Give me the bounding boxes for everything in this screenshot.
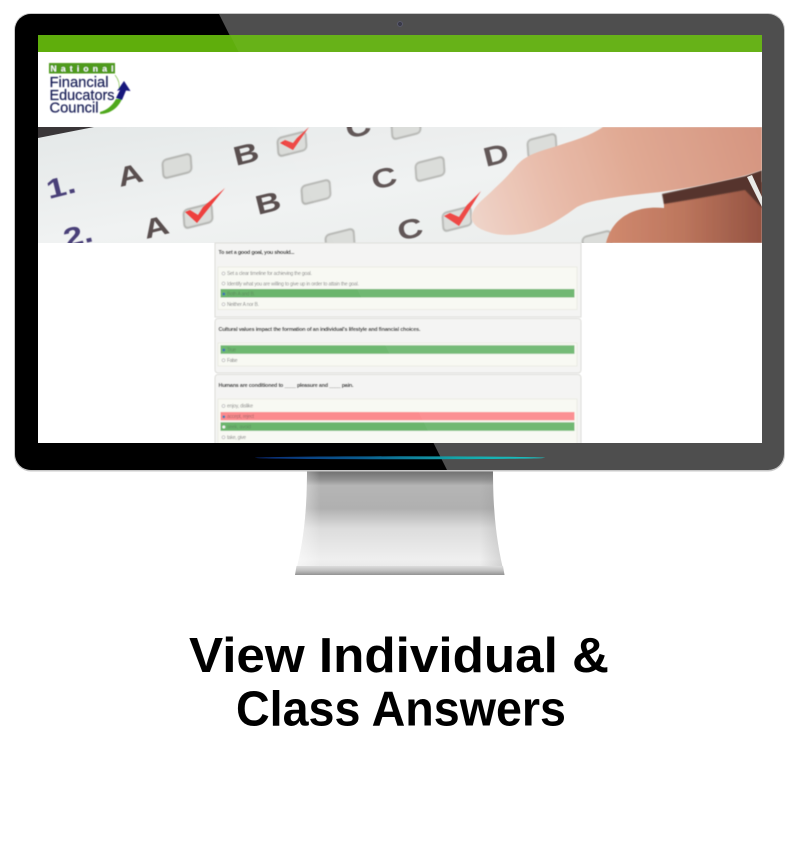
question card 3: seek, avoid <box>227 424 251 430</box>
answer letters: 1. <box>43 168 79 205</box>
question card 1: Identify what you are willing to give up in order to attain the goal. <box>227 282 359 288</box>
answer letters: A <box>140 209 172 245</box>
question card 2: True <box>227 348 236 354</box>
question card 3: Humans are conditioned to ____ pleasure and ____ pain. <box>218 383 354 389</box>
lower finger and shadow <box>606 182 762 243</box>
red checkmarks <box>185 127 481 226</box>
title line 1: View Individual & <box>189 629 609 683</box>
top green bar <box>38 35 762 52</box>
answer letters: C <box>368 160 400 196</box>
question card 2: Cultural values impact the formation of an individual's lifestyle and financial choices. <box>218 327 421 333</box>
question card 3 <box>214 374 582 443</box>
answer letters: B <box>230 136 262 172</box>
answer letters: D <box>480 137 512 173</box>
logo: National Financial Educators Council <box>49 63 130 116</box>
question card 2 <box>215 318 581 373</box>
quiz column <box>214 243 581 454</box>
question card 3: accept, reject <box>227 414 255 420</box>
hero photo: answer sheet with checkmarks and finger <box>38 127 762 243</box>
answer letters <box>47 127 508 243</box>
question card 3: enjoy, dislike <box>227 404 253 410</box>
question card 1: Neither A nor B. <box>227 302 259 308</box>
question card 1: Set a clear timeline for achieving the goal. <box>227 271 312 277</box>
logo: National Financial Educators Council: National <box>50 64 114 74</box>
answer letters: A <box>114 157 146 193</box>
question card 3: take, give <box>227 435 246 441</box>
logo: National Financial Educators Council: Educators <box>50 87 114 104</box>
logo: National Financial Educators Council: Financial <box>50 74 108 91</box>
answer letters: C <box>342 109 374 145</box>
webcam <box>398 22 402 26</box>
question card 1 <box>215 243 581 317</box>
monitor bezel <box>14 13 785 472</box>
pointing finger <box>472 127 762 235</box>
question card 1: To set a good goal, you should... <box>218 250 295 256</box>
answer letters: B <box>252 185 284 221</box>
screen glare <box>230 35 762 242</box>
screen <box>38 35 762 454</box>
logo: National Financial Educators Council: Council <box>50 100 98 116</box>
title line 2: Class Answers <box>236 682 566 736</box>
question card 2: False <box>227 358 238 364</box>
answer letters: 2. <box>60 217 96 254</box>
answer letters: C <box>394 211 426 247</box>
answer boxes <box>161 127 612 243</box>
pen <box>747 175 762 207</box>
monitor <box>14 13 785 575</box>
title <box>189 629 609 736</box>
power light strip <box>255 456 545 459</box>
monitor stand <box>295 471 505 575</box>
question card 1: Both A and B. <box>227 292 255 298</box>
